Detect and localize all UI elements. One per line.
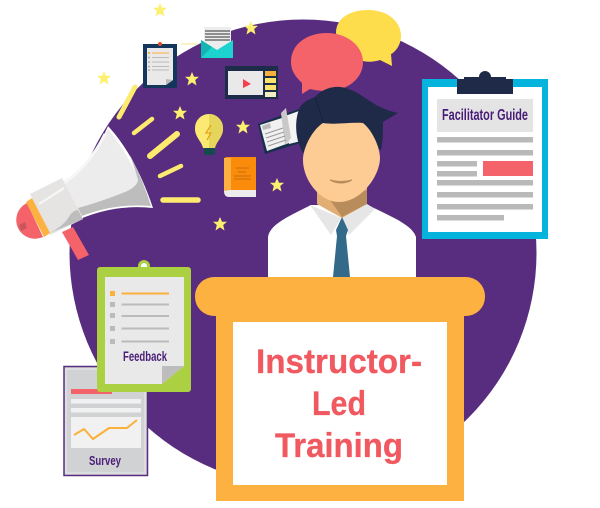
podium	[195, 277, 485, 501]
title: Instructor-Led Training: Led	[312, 385, 366, 423]
survey sheet	[64, 366, 148, 476]
person	[268, 87, 416, 280]
icon: envelope	[181, 27, 233, 58]
clipboard: Facilitator Guide	[422, 71, 548, 239]
purple background circle	[70, 20, 536, 486]
red highlight	[483, 161, 533, 176]
icon: video player	[225, 66, 278, 99]
feedback checklist	[110, 291, 169, 344]
guide text lines	[437, 137, 533, 220]
tie	[333, 217, 350, 277]
feedback label: Feedback	[123, 349, 167, 364]
guide heading	[437, 99, 533, 132]
icon: orange book	[224, 157, 256, 197]
feedback clipboard	[97, 260, 191, 392]
megaphone cone	[60, 126, 153, 219]
sound dashes	[119, 87, 198, 200]
icon: open book	[258, 108, 303, 154]
survey label: Survey	[89, 453, 122, 468]
smile	[330, 180, 352, 183]
podium sign	[233, 322, 447, 485]
icon: small clipboard	[143, 42, 177, 88]
shirt	[268, 205, 416, 280]
title: Instructor-Led Training: Instructor-	[256, 343, 422, 381]
collar	[310, 205, 341, 235]
speech bubble: red	[291, 33, 363, 94]
face	[303, 123, 380, 202]
stars	[97, 3, 284, 230]
clipboard: Facilitator Guide: Facilitator Guide	[442, 107, 528, 124]
icon: light bulb	[195, 114, 223, 155]
title: Instructor-Led Training: Training	[275, 427, 403, 465]
speech bubble: yellow	[336, 10, 401, 66]
megaphone red cap	[16, 203, 43, 239]
megaphone handle	[62, 227, 89, 260]
neck	[317, 185, 367, 218]
icon: megaphone	[16, 126, 153, 260]
hair	[296, 87, 398, 153]
survey chart	[71, 417, 141, 448]
clip	[457, 71, 513, 94]
